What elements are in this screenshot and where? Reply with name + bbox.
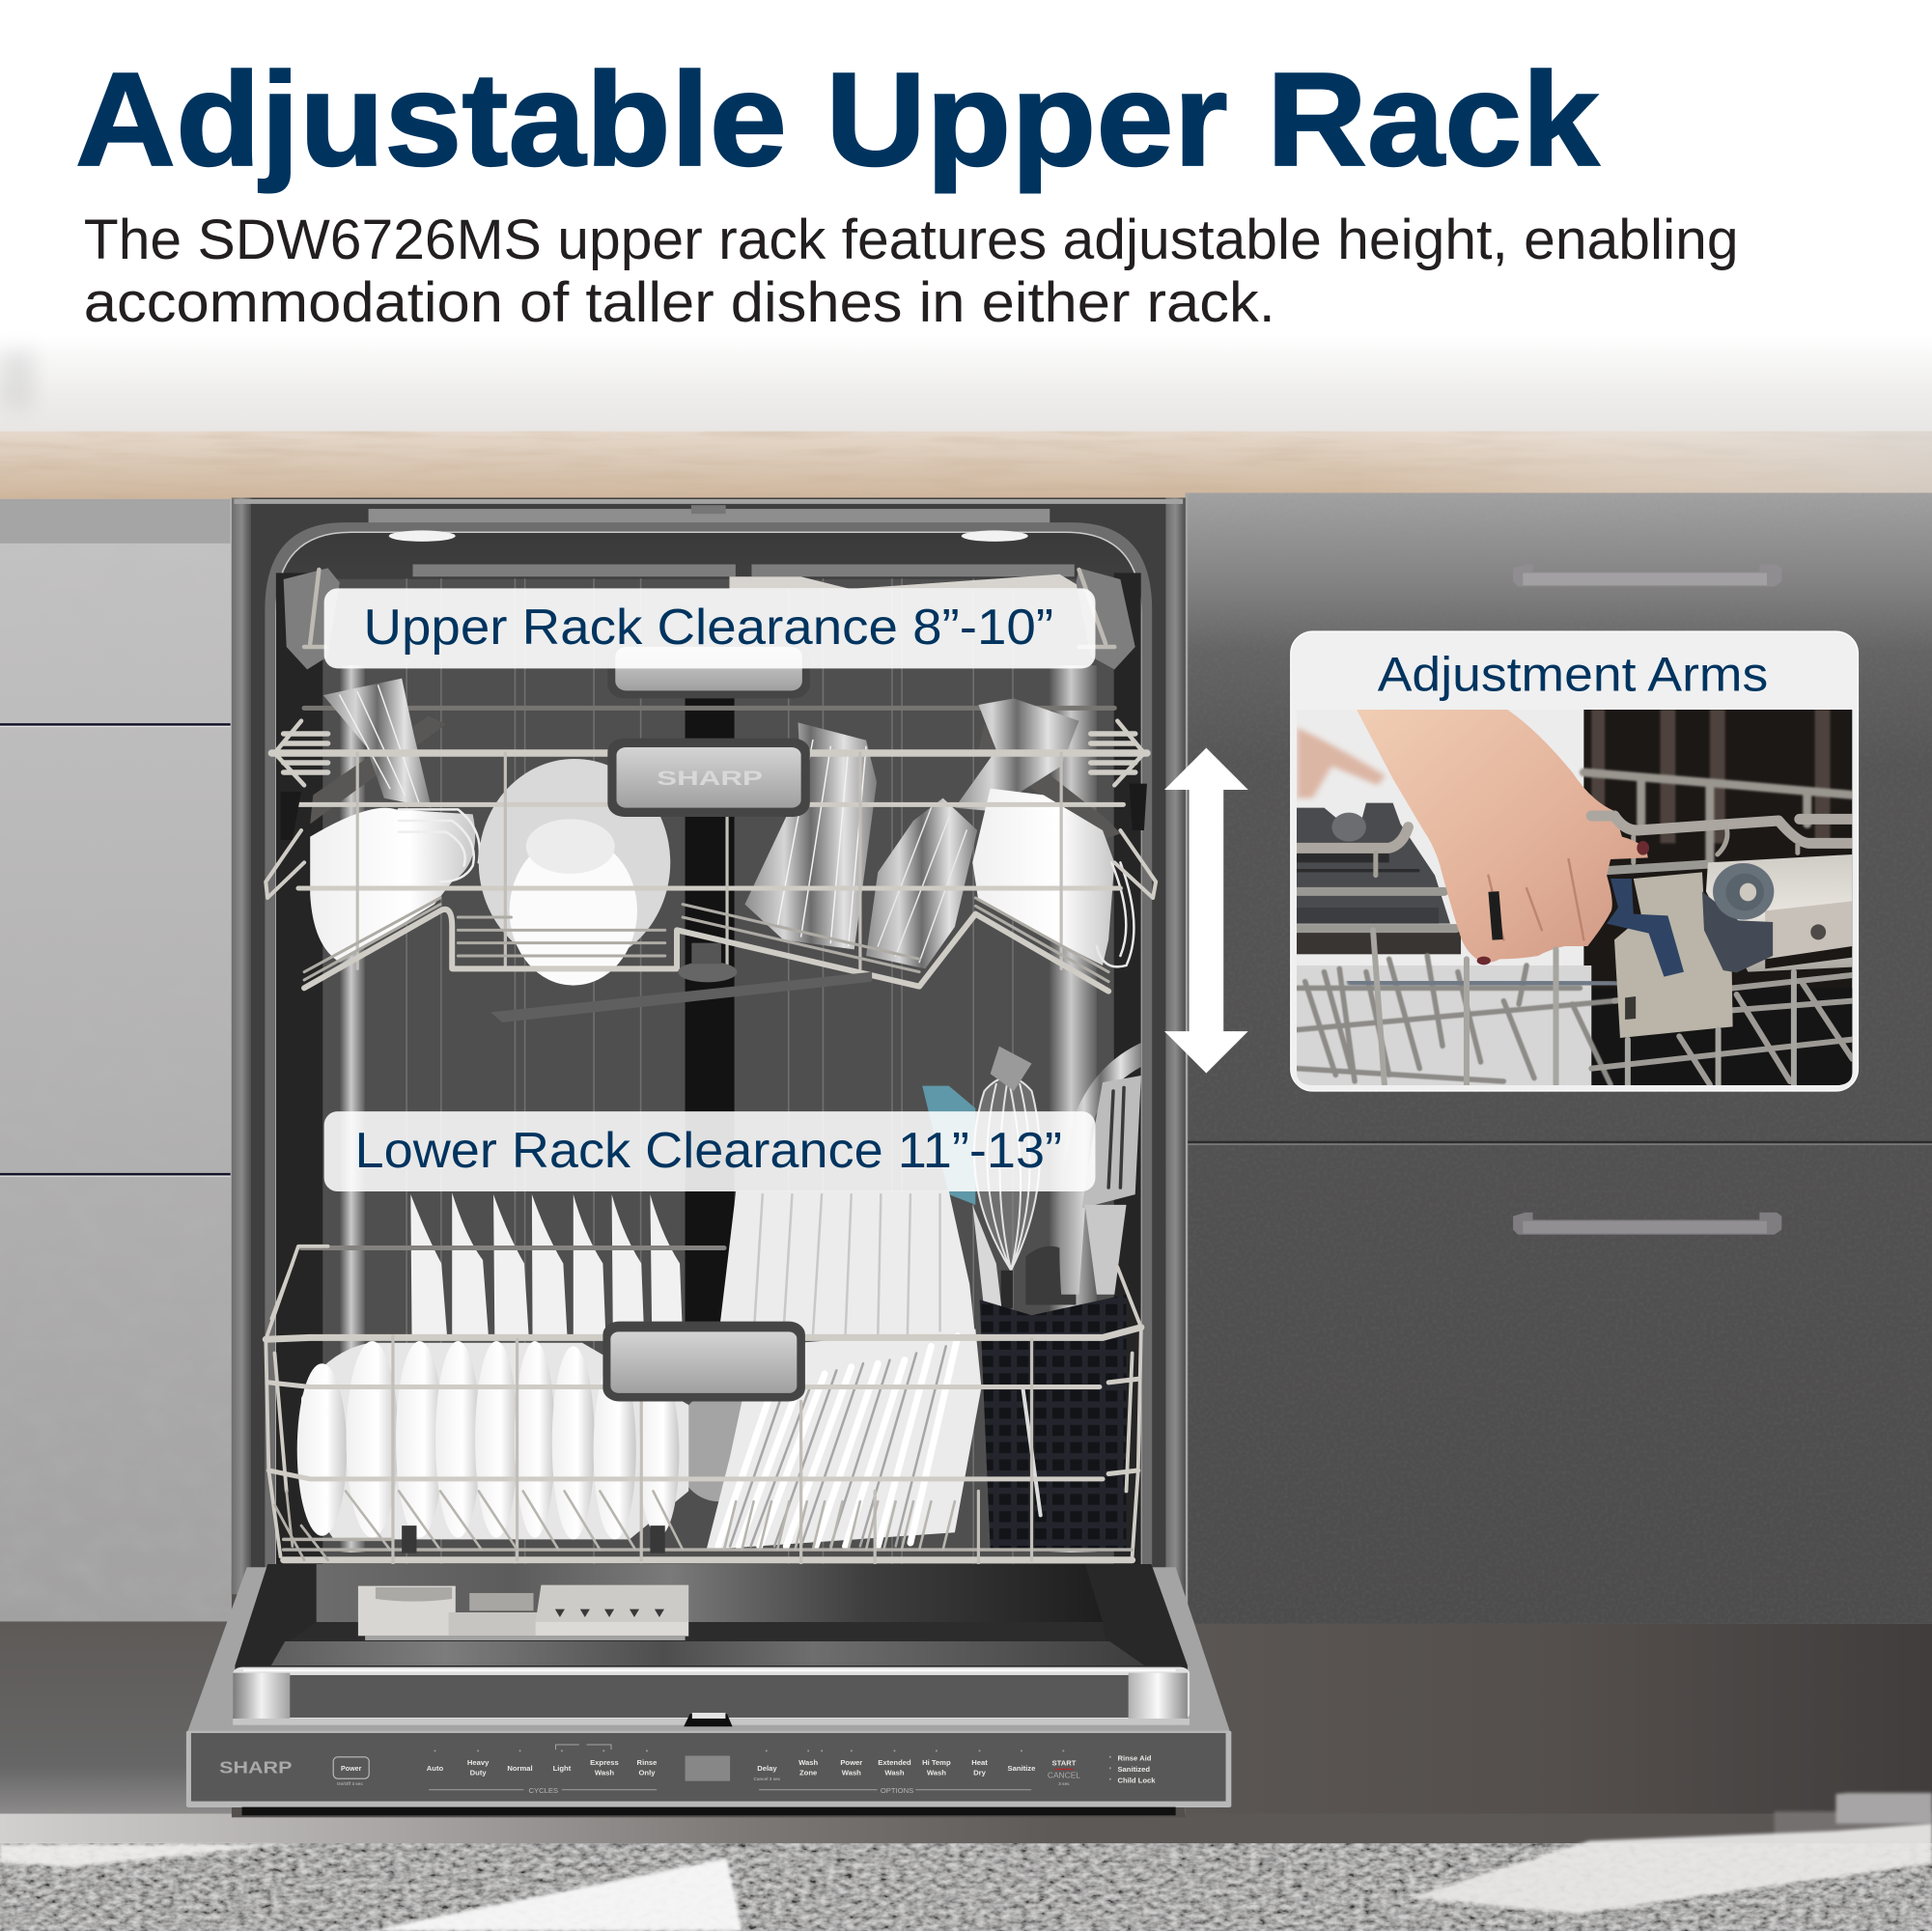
start cancel button — [1048, 1759, 1080, 1786]
tub back wall — [276, 573, 1141, 1589]
cabinet handle lower — [1513, 1213, 1781, 1235]
panel frame — [186, 1731, 1231, 1807]
right bowls — [972, 789, 1134, 966]
roller wheel — [1713, 863, 1774, 920]
right tine panel and glass — [955, 698, 1120, 840]
control panel labels — [219, 1745, 1156, 1795]
cabinet handle upper — [1513, 564, 1781, 586]
left glasses — [323, 679, 432, 808]
cycle buttons: Duty — [470, 1768, 487, 1777]
option buttons: Wash — [927, 1768, 946, 1777]
left concrete cabinets — [0, 499, 234, 1814]
start cancel button: START — [1052, 1759, 1077, 1768]
slanted plates right — [707, 1329, 981, 1550]
spray arm — [490, 943, 872, 1022]
right dark cabinets — [1186, 492, 1932, 1815]
handle brand text: SHARP — [657, 768, 763, 790]
indicator dots — [434, 1750, 1110, 1779]
whisk — [974, 1047, 1040, 1308]
option buttons: Sanitize — [1007, 1764, 1035, 1773]
rack wheels — [402, 1525, 665, 1553]
white utensil handle in basket — [1022, 1387, 1041, 1515]
left bowls — [310, 808, 480, 963]
up-down arrow — [1164, 748, 1248, 1074]
left plate stack — [297, 1341, 688, 1539]
cycle buttons — [427, 1745, 657, 1795]
serving utensils — [972, 1043, 1141, 1312]
power button: On/Off 3 sec — [337, 1781, 363, 1786]
dishwasher tub frame — [232, 498, 1186, 1817]
panel: adjustment arms — [1291, 631, 1858, 1091]
wood countertop — [0, 432, 1932, 503]
status indicators — [1117, 1754, 1156, 1785]
option buttons: Wash — [884, 1768, 905, 1777]
lower rack wires right — [1591, 975, 1852, 1084]
cycle buttons: Wash — [595, 1768, 614, 1777]
center bowl — [674, 1391, 763, 1501]
lower rack with dishes — [266, 1043, 1141, 1571]
center plates — [479, 759, 670, 986]
blurred far hand — [1297, 727, 1386, 798]
door liner recess band — [289, 1622, 1106, 1641]
cycle buttons: Heavy — [467, 1758, 490, 1767]
subtitle: The SDW6726MS upper rack features adjustable height, enabling — [84, 209, 1739, 271]
backsplash wall — [0, 0, 1932, 434]
label: upper rack clearance: Upper Rack Clearance 8”-10” — [363, 600, 1053, 656]
power button — [333, 1757, 369, 1786]
beige bracket — [1614, 872, 1733, 1038]
slide rail — [1706, 854, 1852, 972]
door liner floor — [271, 1641, 1144, 1665]
door front lip — [233, 1667, 1190, 1725]
photo: hand on rack — [1297, 710, 1855, 1086]
wheel clip — [1702, 891, 1773, 972]
rack top bars and spatula — [413, 564, 1084, 589]
option buttons: Delay — [757, 1764, 777, 1773]
panel base shadow — [242, 1807, 1176, 1815]
bracket slots — [1625, 996, 1636, 1020]
cycle buttons: CYCLES — [528, 1786, 558, 1795]
front rails — [1297, 816, 1852, 848]
subtitle — [84, 209, 1739, 334]
panel display — [686, 1756, 730, 1781]
option buttons: Zone — [799, 1768, 817, 1777]
slanted glass — [866, 798, 977, 968]
vertical front wires — [1373, 930, 1794, 1085]
rail over finger — [1591, 816, 1638, 830]
panel face — [191, 1733, 1226, 1802]
blurred rear rack — [1583, 772, 1852, 862]
left tine panel — [310, 716, 446, 824]
lower rack handle — [602, 1322, 805, 1402]
door inner — [235, 1564, 1188, 1719]
upper rack rear handle — [607, 647, 810, 698]
start cancel button: CANCEL — [1048, 1771, 1080, 1780]
side latches — [281, 784, 1147, 840]
option buttons: Power — [840, 1758, 862, 1767]
large plates — [718, 1191, 975, 1339]
card heading: Adjustment Arms — [1378, 646, 1768, 701]
cycle buttons: Light — [553, 1764, 572, 1773]
side gear clusters — [284, 568, 1135, 669]
upper rack front handle — [607, 739, 810, 817]
cycle buttons: Rinse — [637, 1758, 657, 1767]
option buttons: Dry — [973, 1768, 987, 1777]
dark basket — [1297, 803, 1461, 954]
option buttons: Cancel 3 sec — [754, 1777, 781, 1781]
hand — [1357, 710, 1649, 965]
option buttons: Extended — [878, 1758, 911, 1767]
blue lever — [1607, 879, 1684, 977]
title: Adjustable Upper Rack — [75, 45, 1600, 194]
upper rack with dishes — [266, 568, 1156, 1022]
option buttons: Wash — [842, 1768, 861, 1777]
option buttons — [754, 1758, 1035, 1795]
door interior — [186, 1564, 1231, 1815]
start cancel button: 3 sec — [1058, 1781, 1070, 1786]
status indicators: Sanitized — [1117, 1765, 1150, 1774]
lower rack handle face — [610, 1331, 797, 1393]
upper rack wires — [266, 570, 1156, 992]
card background — [1291, 631, 1858, 1091]
status indicators: Rinse Aid — [1117, 1754, 1152, 1763]
upper rack handle face — [617, 747, 801, 808]
back plates row — [410, 1192, 683, 1339]
blurred lower rack tines — [1297, 956, 1614, 1084]
tub lights — [389, 530, 1028, 542]
cycle buttons: Only — [638, 1768, 656, 1777]
door latch — [684, 1713, 733, 1726]
subtitle: accommodation of taller dishes in either rack. — [84, 271, 1275, 334]
option buttons: Wash — [798, 1758, 819, 1767]
label: upper rack clearance — [324, 588, 1095, 668]
utensil basket — [980, 1295, 1127, 1550]
upper rack back wire — [304, 706, 1114, 711]
label: lower rack clearance: Lower Rack Clearance 11”-13” — [355, 1123, 1062, 1179]
door silver sides — [187, 1567, 1230, 1731]
cycle buttons: Normal — [507, 1764, 533, 1773]
photo backdrop — [1297, 710, 1855, 1086]
tall glass center — [744, 722, 877, 949]
option buttons: OPTIONS — [881, 1786, 913, 1795]
option buttons: Heat — [971, 1758, 988, 1767]
option buttons: Hi Temp — [922, 1758, 951, 1767]
stone floor — [0, 1793, 1932, 1931]
lower rack wires — [266, 1246, 1141, 1571]
cycle buttons: Express — [590, 1758, 619, 1767]
back wire lower rack — [301, 1245, 724, 1250]
label: lower rack clearance — [324, 1111, 1095, 1191]
power button: Power — [341, 1765, 362, 1773]
cycle buttons: Auto — [427, 1764, 444, 1773]
door liner back — [317, 1564, 1103, 1622]
teal spatula — [922, 1086, 975, 1205]
status indicators: Child Lock — [1117, 1777, 1156, 1785]
brand logo: SHARP — [219, 1757, 292, 1777]
detergent dispenser — [358, 1585, 688, 1640]
